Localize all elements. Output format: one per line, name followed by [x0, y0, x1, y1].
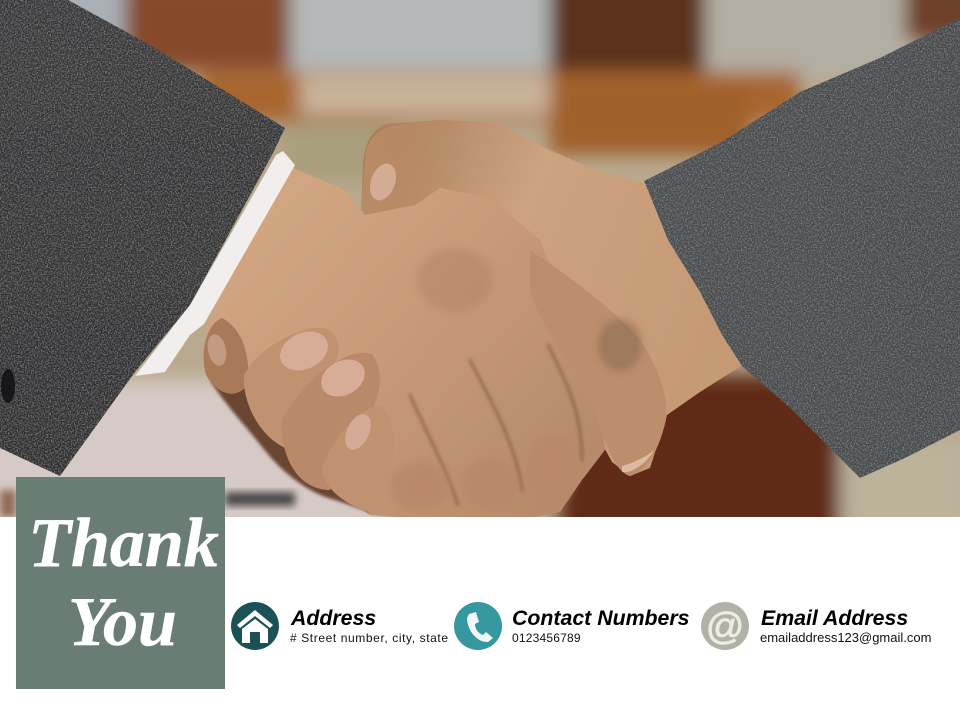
index finger of back hand: [530, 250, 666, 476]
icon: house: [231, 602, 279, 650]
right sleeve: grey knit: [644, 18, 960, 478]
icon: at sign: @: [706, 606, 744, 648]
thumbnail on back-hand thumb: [365, 160, 401, 204]
wrapped fingertips of back hand: [204, 318, 394, 515]
front hand: wrist, back of hand and knuckles: [205, 168, 605, 517]
jacket button: [1, 369, 15, 403]
contact text: numbers: Contact Numbers: [512, 606, 690, 630]
contact text: address: Address: [291, 606, 376, 630]
icon: telephone: [454, 602, 502, 650]
contact text: address: # Street number, city, state: [290, 631, 449, 645]
panel: thank you title: [16, 477, 225, 689]
left sleeve: dark suit jacket: [0, 0, 285, 476]
white shirt cuff: [135, 151, 295, 376]
finger shadow: [210, 370, 370, 512]
contact text: numbers: 0123456789: [512, 631, 581, 645]
back hand: wrist, palm and thumb: [361, 120, 741, 476]
photo: handshake between two business sleeves: [0, 0, 960, 517]
contact text: email: Email Address: [761, 606, 908, 630]
index fingernail: [622, 450, 654, 472]
mottled skin on hand back: [417, 248, 493, 312]
knuckle shadow on index finger: [598, 319, 642, 371]
finger gaps: [410, 345, 582, 505]
contact text: address: [290, 606, 449, 645]
contact text: email: [760, 606, 931, 645]
fingernails: [274, 324, 334, 378]
contact text: email: emailaddress123@gmail.com: [760, 630, 931, 645]
contact text: numbers: [512, 606, 690, 645]
thumb shading: [361, 122, 470, 222]
title line: You: You: [68, 584, 177, 661]
title line: Thank: Thank: [28, 505, 219, 582]
background: blurred office interior: [0, 0, 960, 545]
knuckles at bottom of hand: [390, 434, 576, 510]
